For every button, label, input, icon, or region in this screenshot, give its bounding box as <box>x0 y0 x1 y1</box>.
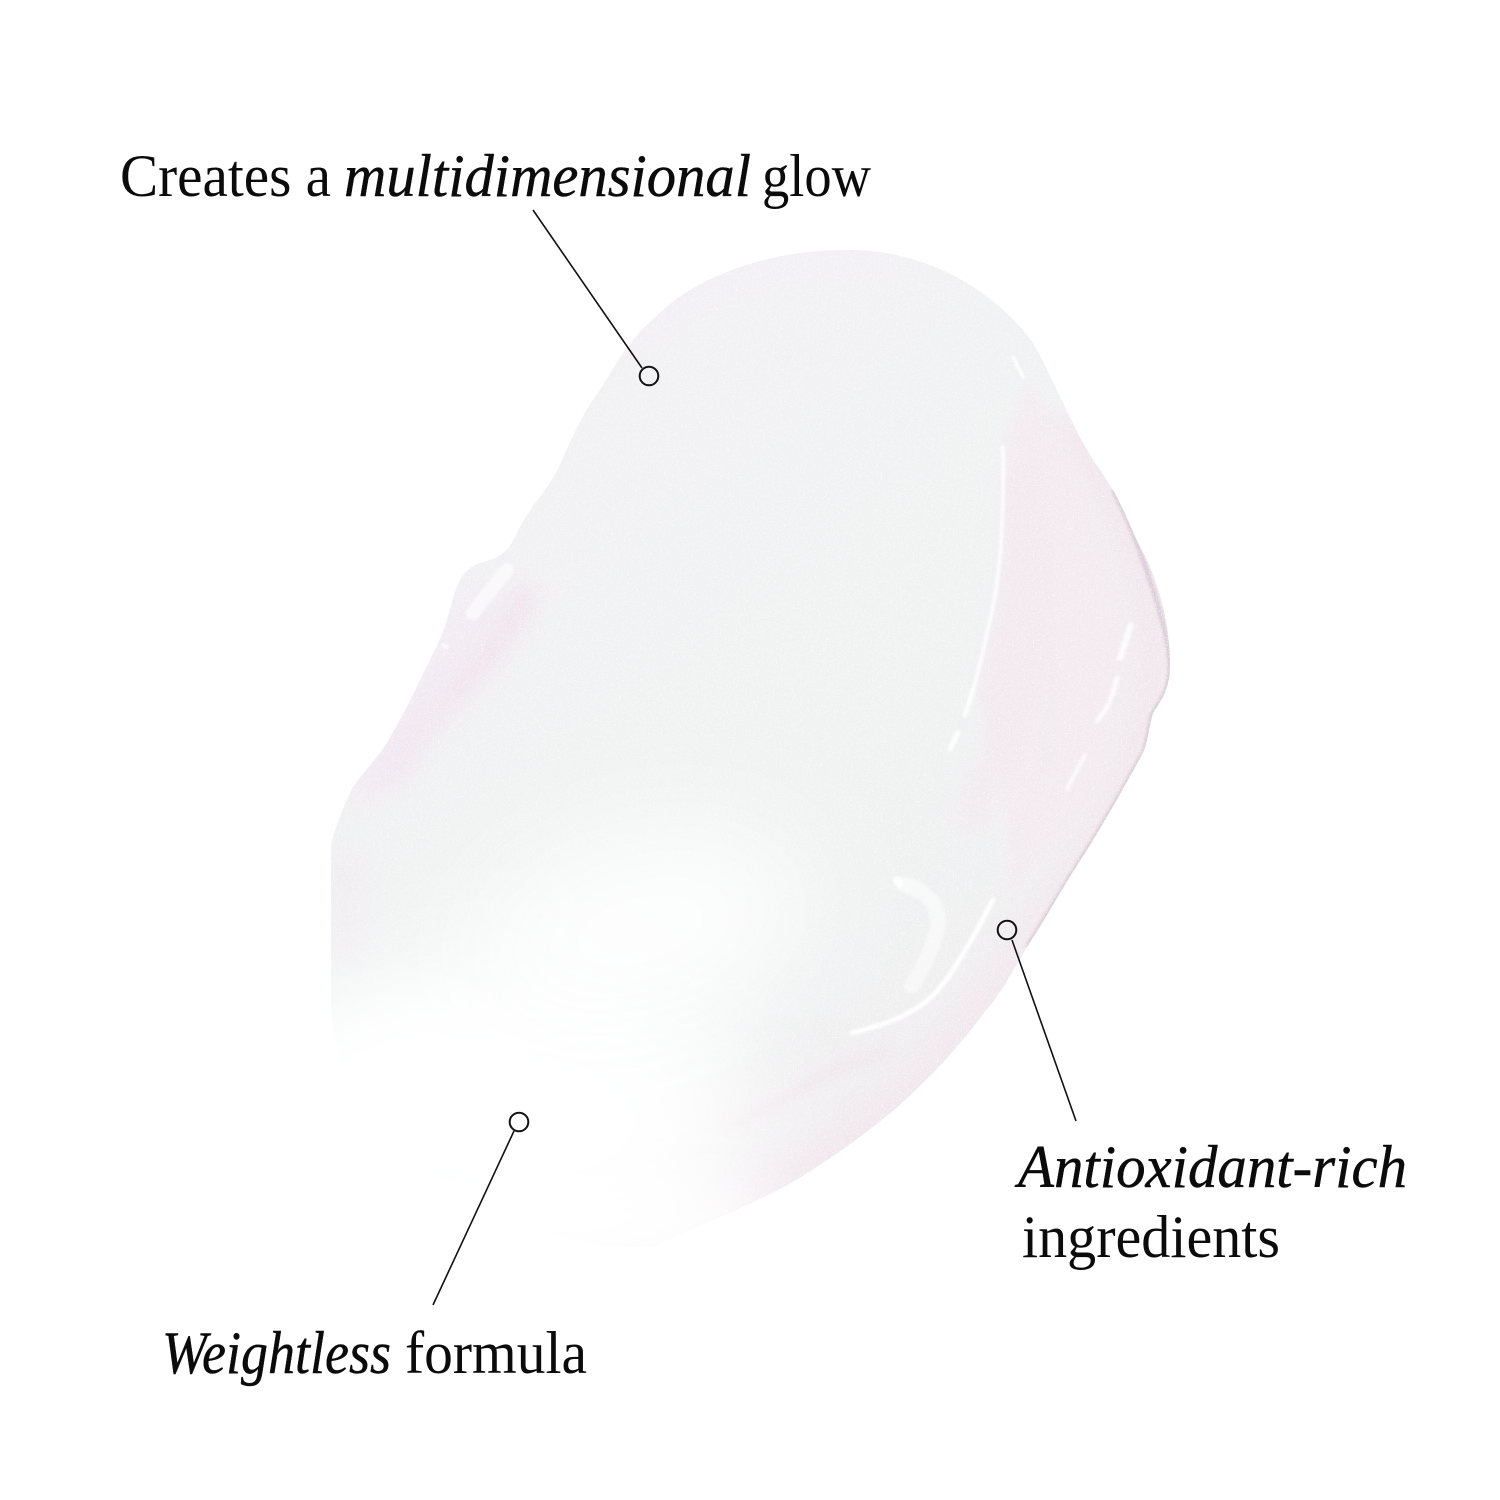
label text: formula <box>405 1320 587 1386</box>
label text: Creates a <box>120 143 331 209</box>
marker <box>640 367 658 385</box>
soft lilac rim of the swatch <box>1068 428 1165 766</box>
glossy highlights <box>443 357 1131 1033</box>
label text <box>120 143 872 209</box>
label text: glow <box>762 143 872 209</box>
pale fold on the right <box>975 380 1140 900</box>
marker <box>998 921 1016 939</box>
label text <box>162 1320 587 1386</box>
swatch base colour <box>331 256 1074 1160</box>
label text: Weightless <box>162 1320 391 1386</box>
sparkle texture <box>331 250 1170 1194</box>
leader line <box>533 210 642 368</box>
pink creases <box>446 593 531 702</box>
callout: antioxidant-rich <box>998 921 1407 1270</box>
label text: ingredients <box>1022 1204 1280 1270</box>
callout: multidimensional glow <box>120 143 872 385</box>
darker outer edge <box>1027 490 1170 947</box>
marker <box>510 1113 528 1131</box>
weightless white fade <box>332 850 770 1246</box>
callout: weightless formula <box>162 1113 587 1386</box>
leader line <box>433 1131 514 1305</box>
cream swatch <box>331 250 1170 1211</box>
label text <box>1014 1134 1407 1270</box>
leader line <box>1012 940 1076 1121</box>
label text: multidimensional <box>344 143 751 209</box>
label text: Antioxidant-rich <box>1014 1134 1407 1200</box>
